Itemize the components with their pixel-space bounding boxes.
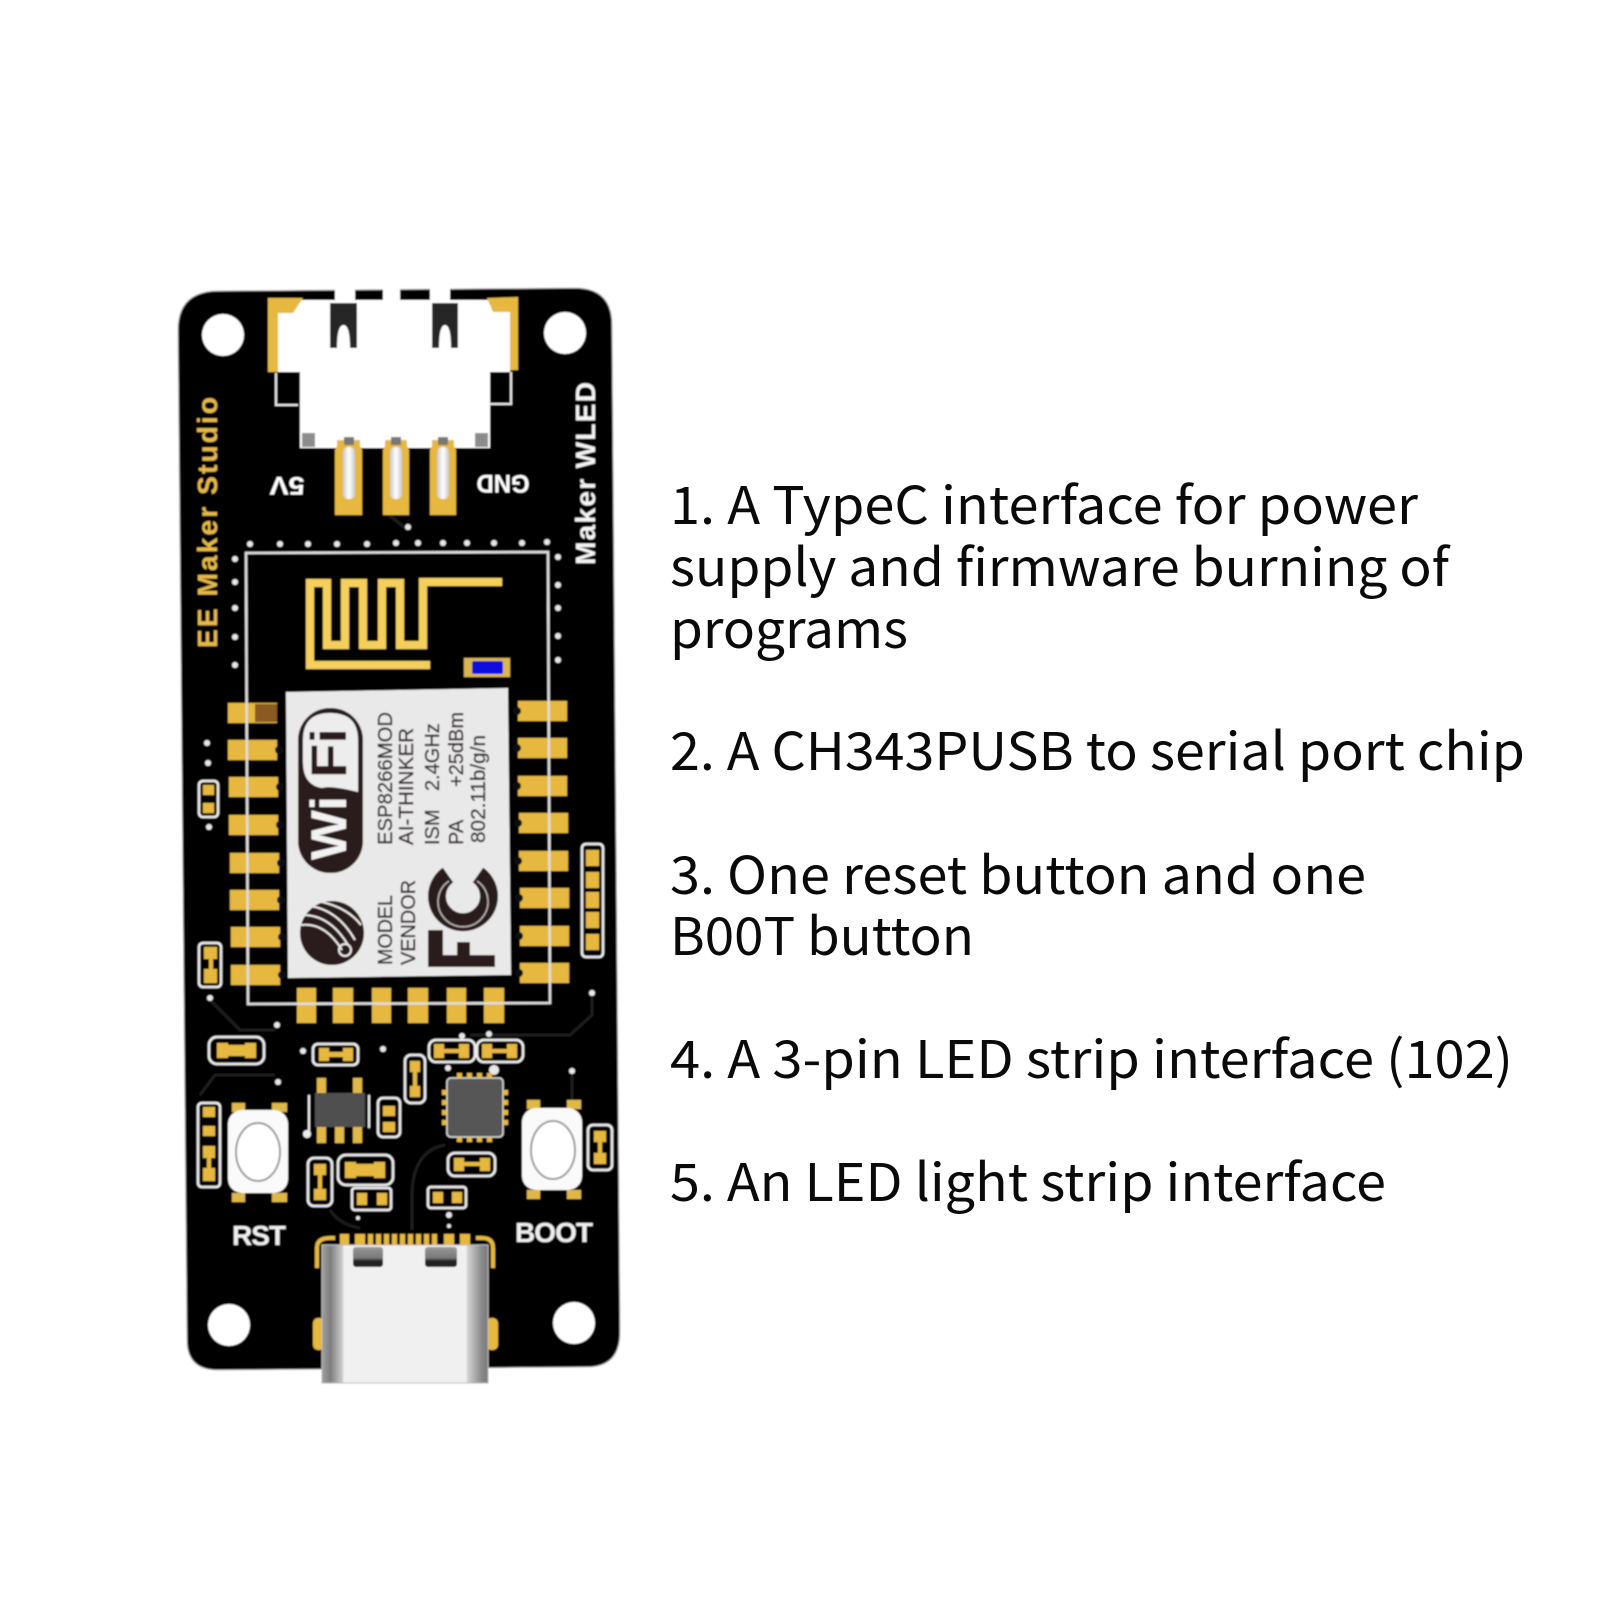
panel: circuit board illustration <box>178 284 620 1383</box>
WiFi logo: Wi <box>301 796 357 860</box>
item 5: 5. An LED light strip interface <box>670 1141 1386 1216</box>
faint copper traces <box>200 512 592 1230</box>
via dots <box>204 524 595 1228</box>
pad holes <box>275 707 523 979</box>
WiFi logo <box>298 708 363 873</box>
module label plate <box>286 688 511 978</box>
item 1: supply and firmware burning of <box>670 526 1451 601</box>
module castellated pads: bottom <box>297 988 504 1023</box>
item 3 <box>670 834 1366 970</box>
small smd components <box>198 781 612 1210</box>
mounting holes <box>202 312 595 1346</box>
item 1: 1. A TypeC interface for power <box>670 464 1419 539</box>
silk label: BOOT: BOOT <box>515 1217 593 1248</box>
plate text: AI-THINKER: AI-THINKER <box>396 728 418 845</box>
connector top notches <box>335 284 450 300</box>
blue LED <box>464 658 510 677</box>
first pad resistor <box>255 704 277 722</box>
connector side outlines <box>276 372 511 405</box>
connector black clips <box>330 303 458 348</box>
plate text: ISM 2.4GHz: ISM <box>422 809 444 845</box>
connector gold shell <box>268 297 518 372</box>
usb metal shell <box>322 1245 488 1383</box>
item 1 <box>670 464 1451 663</box>
board body <box>178 288 620 1370</box>
silk label: GND: GND <box>476 469 530 497</box>
smd pads near module <box>203 785 599 983</box>
button: RST <box>228 1103 288 1202</box>
USB Type-C connector <box>313 1234 498 1383</box>
item 3: 3. One reset button and one <box>670 834 1366 909</box>
feature list <box>670 464 1525 1216</box>
plate text: PA +25dBm: +25dBm <box>446 712 468 787</box>
antenna trace <box>310 582 502 665</box>
silk label: RST: RST <box>232 1220 286 1251</box>
plate text: 802.11b/g/n: 802.11b/g/n <box>468 735 490 843</box>
item 4: 4. A 3-pin LED strip interface (102) <box>670 1018 1513 1093</box>
plate text: MODEL: MODEL <box>375 895 397 965</box>
usb contact comb <box>340 1234 470 1246</box>
module castellated pads: left <box>228 703 280 985</box>
smd: outlined parts below module <box>198 1037 612 1210</box>
chip: SOT regulator <box>303 1078 369 1143</box>
plate text: VENDOR: VENDOR <box>398 880 420 965</box>
button: BOOT <box>522 1100 582 1199</box>
plate text: PA +25dBm: PA <box>446 819 468 845</box>
silk label: Maker WLED: Maker WLED <box>570 382 601 565</box>
plate text: ISM 2.4GHz: 2.4GHz <box>422 723 444 791</box>
WiFi logo: Fi <box>301 728 357 778</box>
header pins <box>335 437 456 515</box>
connector grey feet <box>302 433 315 447</box>
item 2: 2. A CH343PUSB to serial port chip <box>670 710 1525 785</box>
FCC logo <box>428 875 495 967</box>
chip: CH343P QFN <box>442 1073 508 1142</box>
silk label: 5V: 5V <box>269 471 304 499</box>
usb shell tabs <box>353 1247 383 1267</box>
item 1: programs <box>670 588 908 663</box>
connector white housing <box>278 300 510 448</box>
item 3: B00T button <box>670 895 974 970</box>
connector: 3-pin LED strip interface <box>268 284 518 448</box>
smd: left of module <box>199 781 603 987</box>
plate text: ESP8266MOD: ESP8266MOD <box>375 712 397 845</box>
usb gold solder pads <box>317 1238 493 1268</box>
silk label: EE Maker Studio: EE Maker Studio <box>192 397 223 648</box>
espressif globe logo <box>300 901 364 965</box>
module silk outline <box>246 552 550 1004</box>
smd: gold pads below module <box>203 1043 606 1205</box>
module castellated pads: right <box>518 701 569 983</box>
